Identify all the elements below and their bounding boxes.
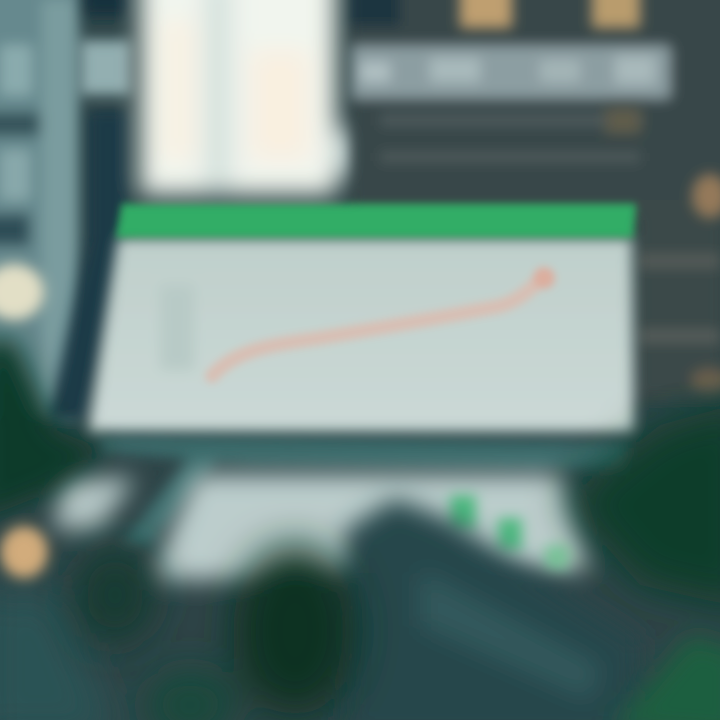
lower bright area	[55, 474, 590, 580]
foreground: right plant	[565, 400, 720, 610]
foreground: lower left plant	[73, 545, 157, 645]
axis smudge	[160, 285, 194, 370]
line chart: red trend	[212, 267, 555, 376]
dark column	[48, 0, 130, 420]
panel body	[88, 238, 634, 432]
foreground: center plant	[145, 545, 357, 720]
chart panel	[88, 204, 636, 432]
green dots: lower keys	[450, 495, 569, 569]
foreground: left plant	[0, 340, 105, 520]
foreground: bottom left teal	[0, 590, 120, 720]
stand: dark teal shelf	[100, 436, 630, 545]
lights: gold top	[460, 0, 720, 392]
bright window area	[140, 0, 371, 195]
building: left facade	[0, 0, 80, 420]
light: lower left glow	[0, 526, 48, 578]
foreground: dark device	[340, 498, 640, 720]
foreground: bottom right leaf	[610, 635, 720, 720]
panel header: green bar	[116, 204, 636, 238]
light: left glow	[0, 264, 44, 320]
building: right dark facade	[350, 0, 720, 400]
